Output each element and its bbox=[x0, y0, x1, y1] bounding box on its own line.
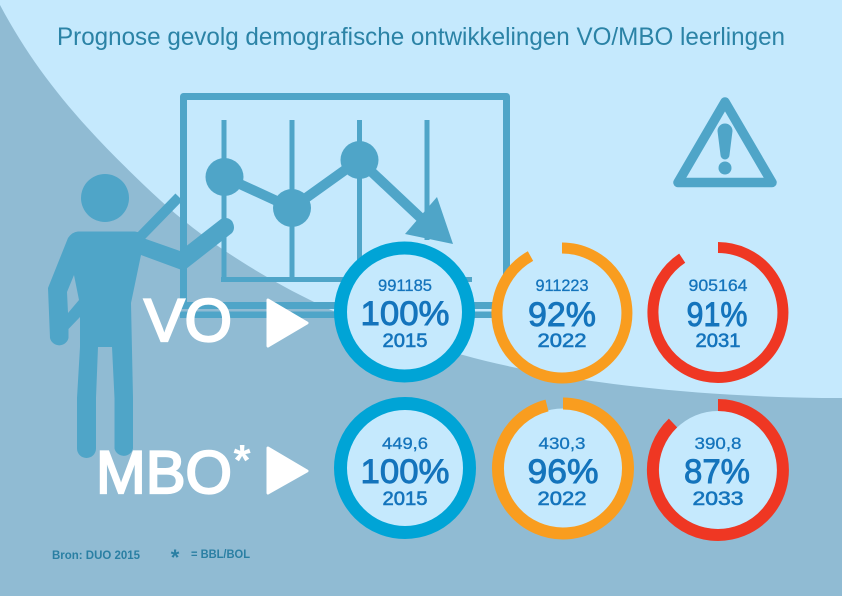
source note: Bron: DUO 2015 bbox=[52, 548, 140, 562]
ring: MBO 2022: 2022 bbox=[538, 489, 586, 510]
ring: VO 2015: 100% bbox=[360, 295, 450, 333]
footnote: = BBL/BOL bbox=[191, 547, 250, 561]
ring: MBO 2033 bbox=[653, 405, 783, 535]
ring: VO 2022: 2022 bbox=[538, 331, 586, 352]
ring: MBO 2022: 430,3 bbox=[538, 434, 586, 453]
arrow: MBO bbox=[268, 448, 307, 493]
ring: VO 2031 bbox=[653, 248, 783, 377]
ring: MBO 2033: 87% bbox=[684, 453, 750, 491]
ring: VO 2031: 2031 bbox=[696, 331, 740, 352]
icon: presentation board with line chart bbox=[180, 96, 510, 318]
footnote bbox=[171, 545, 250, 570]
ring: MBO 2022 bbox=[498, 404, 628, 534]
ring: VO 2031: 91% bbox=[686, 296, 748, 334]
ring: MBO 2015: 100% bbox=[360, 453, 450, 491]
ring: VO 2015 bbox=[340, 248, 468, 376]
ring: VO 2022: 92% bbox=[528, 296, 596, 334]
footnote: * bbox=[171, 545, 180, 570]
ring: VO 2022 bbox=[497, 248, 627, 378]
icon: warning triangle bbox=[678, 102, 772, 182]
label: VO: VO bbox=[144, 287, 232, 354]
ring: MBO 2015: 449,6 bbox=[382, 434, 428, 453]
ring: VO 2015: 991185 bbox=[378, 276, 432, 295]
title: Prognose gevolg demografische ontwikkelingen VO/MBO leerlingen bbox=[57, 23, 785, 51]
ring: MBO 2033: 390,8 bbox=[694, 434, 742, 453]
icon: presenter figure bbox=[48, 174, 234, 458]
arrow: VO bbox=[268, 300, 307, 346]
ring: VO 2022: 911223 bbox=[536, 276, 588, 295]
ring: MBO 2022: 96% bbox=[528, 453, 598, 491]
ring: VO 2015: 2015 bbox=[382, 331, 428, 352]
label: asterisk: * bbox=[233, 436, 251, 485]
ring: MBO 2033: 2033 bbox=[692, 489, 744, 510]
ring: MBO 2015: 2015 bbox=[382, 489, 428, 510]
ring: MBO 2015 bbox=[340, 404, 470, 532]
label: MBO: MBO bbox=[96, 439, 232, 506]
ring: VO 2031: 905164 bbox=[688, 276, 748, 295]
